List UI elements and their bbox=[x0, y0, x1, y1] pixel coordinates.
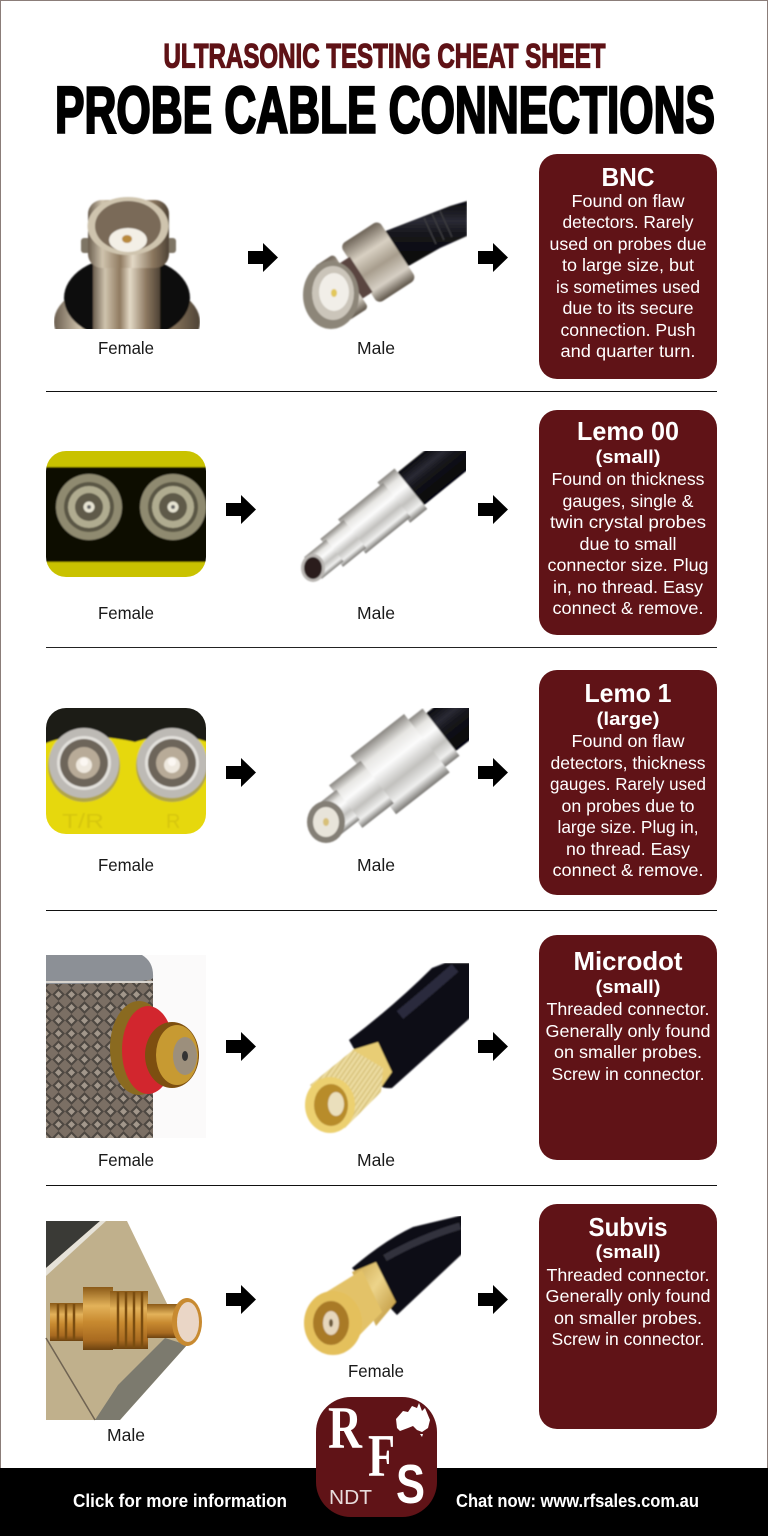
panel: Subvis: Screw in connector. bbox=[552, 1329, 704, 1349]
label: female: Female bbox=[98, 603, 154, 623]
label: male: Male bbox=[357, 338, 395, 358]
row: Lemo 1 bbox=[44, 651, 717, 895]
label: male: Male bbox=[357, 1150, 395, 1170]
panel: Microdot: Screw in connector. bbox=[552, 1064, 704, 1084]
label: male: Male bbox=[107, 1425, 145, 1445]
logo: RFS NDT: R bbox=[328, 1395, 363, 1461]
panel: Subvis: Subvis bbox=[588, 1212, 668, 1242]
panel: Subvis: (small) bbox=[596, 1242, 660, 1262]
panel: Lemo 00: (small) bbox=[596, 447, 660, 467]
photo: BNC female connector bbox=[54, 196, 200, 329]
panel: Lemo 00: connect & remove. bbox=[552, 598, 704, 618]
label: female: Female bbox=[98, 1150, 154, 1170]
panel: Subvis bbox=[539, 1204, 717, 1429]
panel: Microdot bbox=[539, 935, 717, 1160]
row: Lemo 00 bbox=[44, 410, 717, 635]
panel: Lemo 1: gauges. Rarely used bbox=[550, 774, 706, 794]
photo: BNC male connector bbox=[303, 201, 467, 329]
panel: Microdot: Generally only found bbox=[546, 1021, 710, 1041]
panel: BNC: due to its secure bbox=[562, 298, 694, 318]
panel: Lemo 1: Found on flaw bbox=[572, 731, 685, 751]
arrow bbox=[226, 758, 256, 787]
arrow bbox=[478, 495, 508, 524]
photo: Lemo 00 male connector bbox=[300, 451, 466, 583]
photo: Microdot male connector bbox=[305, 963, 471, 1133]
panel: Lemo 1: large size. Plug in, bbox=[558, 817, 698, 837]
arrow bbox=[478, 758, 508, 787]
panel: BNC: to large size, but bbox=[562, 255, 694, 275]
panel: Lemo 1: connect & remove. bbox=[552, 860, 704, 880]
arrow bbox=[248, 243, 278, 272]
row: BNC bbox=[54, 154, 717, 379]
logo: RFS NDT: NDT bbox=[329, 1487, 372, 1509]
panel: Lemo 1: on probes due to bbox=[562, 796, 694, 816]
panel: BNC: is sometimes used bbox=[556, 277, 700, 297]
photo: Lemo 1 female sockets bbox=[44, 706, 208, 836]
photo: Lemo 1 female sockets: R bbox=[166, 811, 180, 833]
row: Subvis bbox=[46, 1204, 717, 1445]
panel: Lemo 1: Lemo 1 bbox=[584, 678, 672, 708]
panel: Lemo 1: no thread. Easy bbox=[566, 839, 690, 859]
row: Microdot bbox=[46, 935, 717, 1170]
panel: Lemo 00: in, no thread. Easy bbox=[553, 577, 703, 597]
label: male: Male bbox=[357, 855, 395, 875]
panel: Microdot: Microdot bbox=[574, 946, 683, 976]
arrow bbox=[478, 1285, 508, 1314]
panel: Microdot: (small) bbox=[596, 977, 660, 997]
logo: RFS NDT: F bbox=[368, 1423, 395, 1489]
arrow bbox=[226, 1285, 256, 1314]
panel: Lemo 1 bbox=[539, 670, 717, 895]
label: male: Male bbox=[357, 603, 395, 623]
footer bar bbox=[0, 1468, 768, 1536]
panel: Microdot: on smaller probes. bbox=[554, 1042, 702, 1062]
footer bar: Click for more information bbox=[73, 1491, 287, 1511]
photo: Subvis female connector bbox=[304, 1215, 463, 1355]
label: female: Female bbox=[348, 1361, 404, 1381]
photo: Lemo 00 female sockets bbox=[44, 449, 208, 579]
panel: Lemo 00: Lemo 00 bbox=[577, 416, 679, 446]
panel: Lemo 00: gauges, single & bbox=[562, 491, 694, 511]
logo: RFS NDT bbox=[316, 1395, 437, 1517]
arrow bbox=[226, 495, 256, 524]
icon: map of Australia bbox=[396, 1403, 430, 1437]
arrow bbox=[226, 1032, 256, 1061]
panel: Subvis: on smaller probes. bbox=[554, 1308, 702, 1328]
panel: Subvis: Threaded connector. bbox=[546, 1265, 710, 1285]
photo: Subvis male connector on probe bbox=[46, 1221, 202, 1420]
panel: BNC: BNC bbox=[602, 162, 655, 192]
panel: Microdot: Threaded connector. bbox=[546, 999, 710, 1019]
panel: Lemo 1: (large) bbox=[596, 709, 660, 729]
panel: BNC: and quarter turn. bbox=[560, 341, 696, 361]
panel: BNC: used on probes due bbox=[550, 234, 706, 254]
photo: Lemo 1 male connector bbox=[306, 708, 469, 844]
panel: Lemo 00: due to small bbox=[580, 534, 676, 554]
panel: BNC: Found on flaw bbox=[572, 191, 685, 211]
panel: Subvis: Generally only found bbox=[546, 1286, 710, 1306]
panel: Lemo 1: detectors, thickness bbox=[550, 753, 706, 773]
panel: BNC: connection. Push bbox=[560, 320, 696, 340]
panel: Lemo 00: connector size. Plug bbox=[548, 555, 708, 575]
panel: Lemo 00: Found on thickness bbox=[552, 469, 705, 489]
arrow bbox=[478, 1032, 508, 1061]
logo: RFS NDT: S bbox=[396, 1453, 425, 1515]
panel: BNC bbox=[539, 154, 717, 379]
photo: Microdot female on knurled probe bbox=[46, 955, 206, 1138]
arrow bbox=[478, 243, 508, 272]
label: female: Female bbox=[98, 338, 154, 358]
panel: Lemo 00: twin crystal probes bbox=[550, 512, 706, 532]
label: female: Female bbox=[98, 855, 154, 875]
photo: Lemo 1 female sockets: T/R bbox=[62, 811, 104, 833]
panel: Lemo 00 bbox=[539, 410, 717, 635]
footer bar: Chat now: www.rfsales.com.au bbox=[456, 1491, 699, 1511]
panel: BNC: detectors. Rarely bbox=[562, 212, 694, 232]
